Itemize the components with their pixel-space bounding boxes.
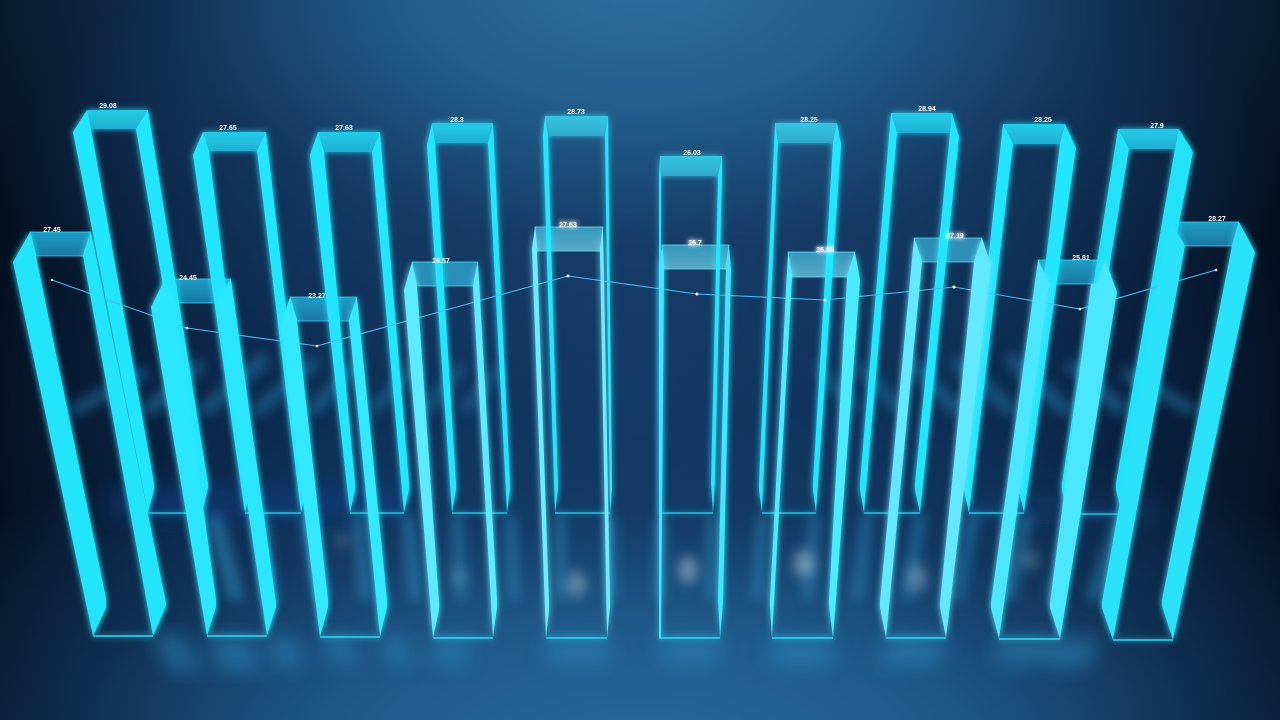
light spots on floor: [334, 532, 1039, 597]
front bar 7: [770, 252, 860, 638]
back bar 4: [427, 123, 510, 513]
back bar 10: [1062, 129, 1193, 514]
value labels: front row: 26.85: [816, 247, 834, 254]
back bar 1: [73, 110, 208, 513]
value labels: back row: 28.25: [800, 117, 818, 124]
value labels: back row: 29.08: [99, 103, 117, 110]
blue reflection band: [110, 488, 1160, 524]
back bar 9: [964, 124, 1076, 513]
value labels: back row: 28.94: [918, 106, 936, 113]
value labels: back row: 27.65: [219, 125, 237, 132]
back bar 6: [659, 156, 722, 513]
front row floor reflections: [150, 634, 1100, 672]
value labels: front row: 26.57: [432, 258, 450, 265]
trend line: [51, 269, 1217, 347]
value labels: back row: 28.73: [567, 109, 585, 116]
value labels: back row: 26.03: [683, 150, 701, 157]
value labels: back row: 27.9: [1150, 123, 1164, 130]
front bar 10: [1102, 222, 1255, 640]
value labels: front row: 26.7: [688, 240, 702, 247]
front row top caps: [30, 222, 1239, 321]
value labels: front row: 24.45: [179, 275, 197, 282]
front bar 6: [659, 245, 731, 638]
back row floor reflections: [205, 515, 1128, 600]
front bar 9: [991, 260, 1117, 639]
front bar 1: [13, 232, 166, 636]
value labels: front row: 25.81: [1072, 255, 1090, 262]
value labels: front row: 27.63: [559, 222, 577, 229]
front bar 4: [404, 262, 497, 638]
value labels: front row: [43, 216, 1226, 300]
value labels: back row: 28.3: [450, 117, 464, 124]
value labels: back row: [99, 103, 1164, 157]
value labels: front row: 23.27: [308, 293, 326, 300]
back bar 5: [543, 116, 612, 513]
value labels: front row: 28.27: [1208, 216, 1226, 223]
back bar 3: [310, 132, 409, 513]
value labels: back row: 27.63: [335, 125, 353, 132]
front bar 5: [532, 227, 610, 638]
back row of bars: [73, 110, 1193, 514]
front bar 8: [880, 238, 991, 638]
value labels: front row: 27.45: [43, 227, 61, 234]
value labels: back row: 28.25: [1034, 117, 1052, 124]
floor reflections: [66, 352, 1200, 672]
front bar 3: [281, 297, 387, 637]
fan of wall reflections: [66, 352, 1200, 416]
value labels: front row: 27.19: [946, 233, 964, 240]
back bar 7: [759, 123, 841, 513]
back bar 2: [193, 132, 306, 513]
back bar 8: [860, 113, 959, 513]
front bar 2: [151, 279, 276, 636]
front row of bars (sides and base): [13, 222, 1255, 640]
data points: [51, 269, 1217, 347]
